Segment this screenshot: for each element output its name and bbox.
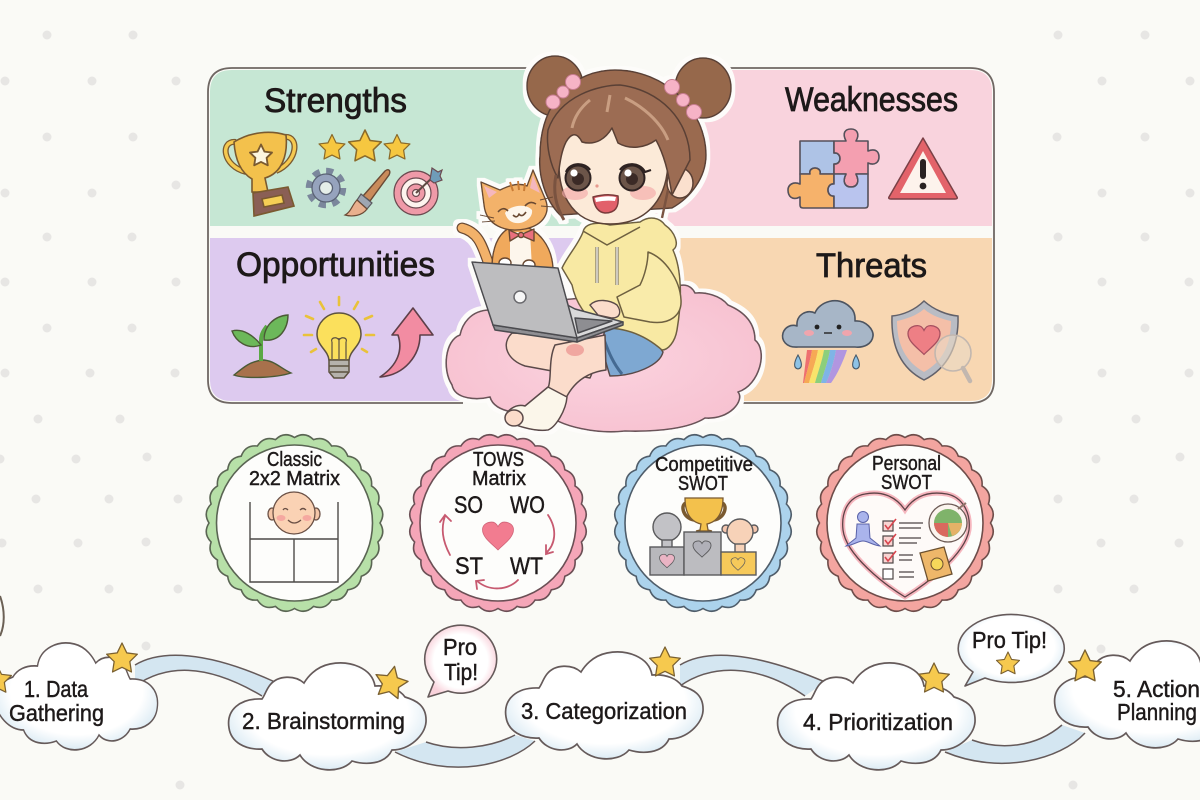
- step: 2. Brainstorming: [229, 663, 426, 770]
- icon: heart frame: [843, 493, 969, 597]
- icon: shield with heart and magnifier: [892, 301, 971, 381]
- character: girl head: [527, 56, 731, 224]
- label: Classic 2x2 Matrix: [249, 449, 340, 490]
- label: Personal SWOT: [872, 453, 941, 494]
- character: laptop: [472, 262, 623, 342]
- step: 1. Data Gathering: [0, 643, 158, 750]
- label: step 5: 5. Action: [1113, 676, 1200, 702]
- badge: Personal SWOT: [817, 435, 993, 611]
- label: step 1: 1. Data: [24, 676, 88, 702]
- character: girl back leg and shorts: [505, 327, 663, 430]
- badge: TOWS Matrix: [410, 435, 586, 611]
- label: SO WO ST WT: WO: [510, 492, 545, 519]
- panel: SWOT matrix: [208, 68, 994, 403]
- icon: notebook: [920, 547, 952, 581]
- ribbon: connector 1 to 2: [135, 655, 275, 696]
- label: TOWS Matrix: Matrix: [472, 468, 526, 490]
- chart: 2x2 grid lines: [250, 502, 338, 582]
- cushion: pink cloud: [446, 285, 761, 432]
- icon: star: [1069, 650, 1101, 681]
- icon: salad bowl: [929, 503, 967, 542]
- label: SO WO ST WT: SO: [454, 492, 483, 519]
- list: checklist: [883, 519, 923, 579]
- label: step 1: [9, 676, 104, 726]
- arrows: TOWS cycle: [440, 515, 554, 589]
- icon: smiling face: [268, 492, 320, 534]
- illustration: girl with cat and laptop on pink cloud: [446, 56, 761, 432]
- label: step 1: Gathering: [9, 700, 104, 726]
- panel: Threats: [660, 238, 992, 401]
- icon: gear: [309, 171, 343, 205]
- ribbon: connector 3 to 4: [680, 655, 825, 696]
- icon: star: [372, 663, 410, 700]
- icon: sprout: [232, 315, 291, 377]
- callout: Pro Tip circle: Tip!: [444, 659, 478, 685]
- icon: star: [107, 643, 137, 672]
- icon: paintbrush: [345, 170, 390, 216]
- icon: upward arrow: [380, 308, 433, 377]
- icon: target with dart: [394, 168, 442, 215]
- character: typing hand: [590, 300, 620, 318]
- label: Classic 2x2 Matrix: 2x2 Matrix: [249, 468, 340, 490]
- label: Classic 2x2 Matrix: Classic: [267, 449, 322, 471]
- label: step 5: [1113, 676, 1200, 725]
- icon: small star: [996, 652, 1020, 674]
- step: 4. Prioritization: [778, 663, 975, 770]
- panel: Opportunities: [210, 238, 600, 401]
- ribbon: connector 2 to 3: [395, 735, 535, 767]
- icon: star: [650, 647, 680, 676]
- step: 3. Categorization: [506, 647, 703, 759]
- icon: star at left edge: [0, 665, 11, 692]
- icon: three stars: [319, 130, 410, 161]
- icon: meditating figure: [846, 512, 880, 546]
- label: SO WO ST WT: WT: [510, 553, 543, 580]
- badge: Classic 2x2 Matrix: [206, 435, 383, 611]
- label: Personal SWOT: SWOT: [881, 472, 932, 494]
- label: SO WO ST WT: [454, 492, 545, 580]
- label: TOWS Matrix: [472, 449, 526, 490]
- heading: Threats: Threats: [816, 247, 927, 285]
- panel: Weaknesses: [650, 70, 992, 226]
- character: cat: [462, 170, 553, 270]
- icon: trophy: [226, 132, 294, 216]
- label: SO WO ST WT: ST: [455, 553, 483, 580]
- icon: heart outline: [843, 493, 969, 597]
- label: Competitive SWOT: [655, 454, 753, 495]
- heading: Strengths: Strengths: [264, 82, 407, 120]
- label: step 3: 3. Categorization: [521, 698, 687, 724]
- heading: Weaknesses: Weaknesses: [785, 81, 958, 119]
- icon: star: [919, 663, 949, 692]
- callout: Pro Tip circle: Pro: [443, 634, 477, 660]
- callout: Pro Tip circle: [425, 625, 497, 697]
- ribbon: connector 4 to 5: [945, 725, 1085, 763]
- label: Competitive SWOT: SWOT: [678, 473, 728, 495]
- label: step 4: 4. Prioritization: [803, 709, 953, 735]
- badge: Competitive SWOT: [615, 435, 791, 611]
- icon: light bulb: [304, 297, 374, 378]
- icon: rain cloud with rainbow: [783, 301, 873, 383]
- callout: Pro Tip speech bubble: Pro Tip!: [972, 627, 1047, 653]
- label: step 2: 2. Brainstorming: [242, 708, 405, 734]
- callout: Pro Tip speech bubble: [958, 614, 1064, 686]
- character: yellow hoodie: [562, 218, 681, 350]
- step: 5. Action Planning: [1055, 641, 1200, 748]
- heading: Opportunities: Opportunities: [236, 246, 435, 284]
- icon: gold trophy: [683, 498, 725, 531]
- label: Competitive SWOT: Competitive: [655, 454, 753, 476]
- label: Personal SWOT: Personal: [872, 453, 941, 475]
- icon: puzzle: [788, 129, 879, 208]
- panel: Strengths: [210, 70, 590, 226]
- icon: heart: [482, 522, 514, 550]
- label: TOWS Matrix: TOWS: [473, 449, 524, 471]
- icon: warning triangle: [889, 138, 957, 199]
- icon: podium with figures: [650, 513, 758, 575]
